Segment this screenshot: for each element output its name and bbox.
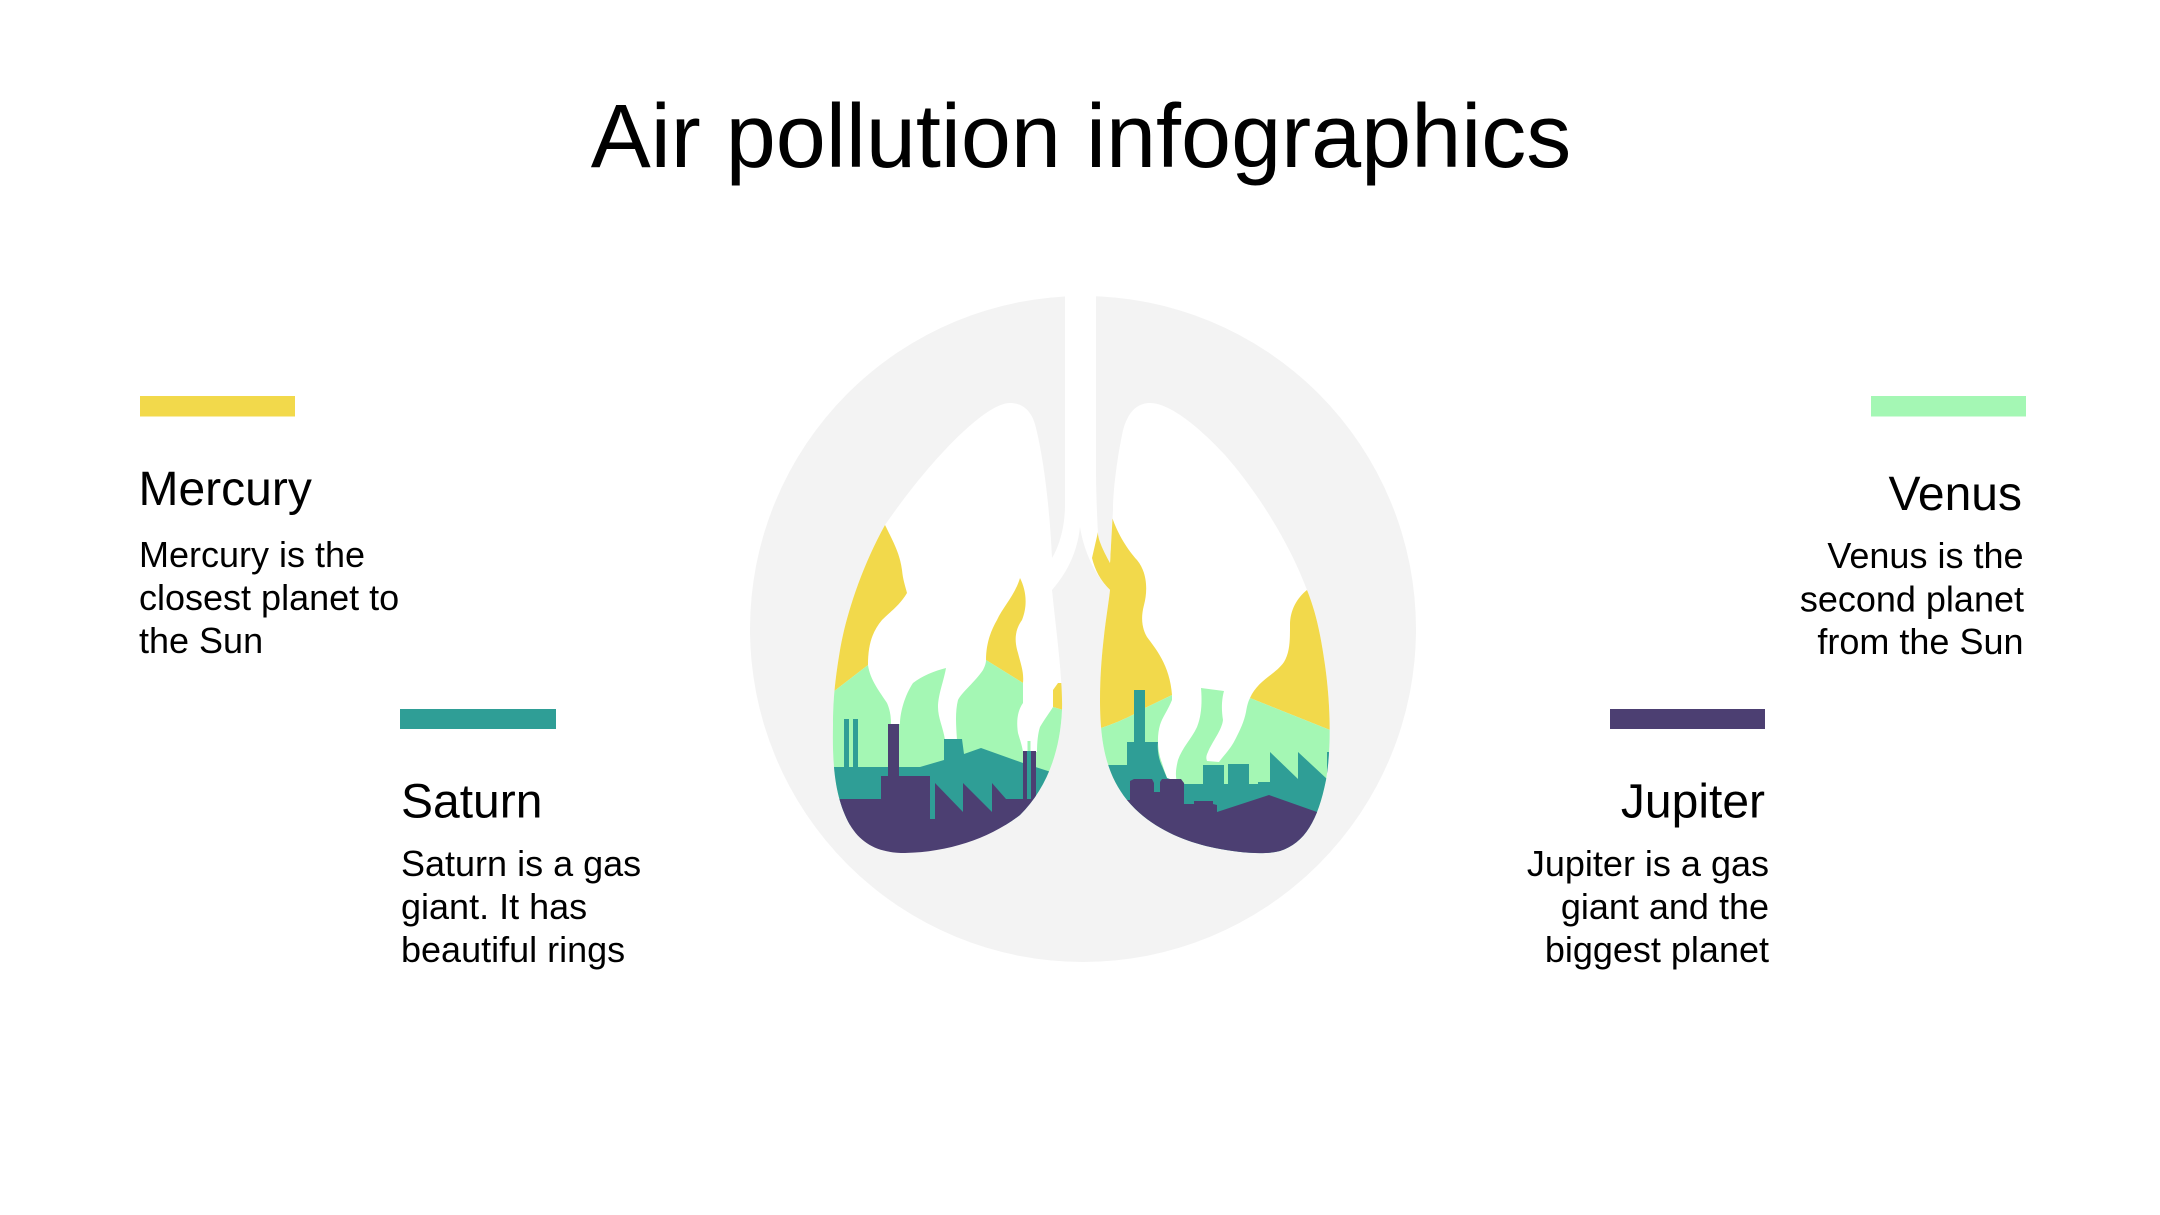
lungs and trachea silhouette — [833, 296, 1330, 853]
Mercury colour bar — [140, 396, 295, 416]
Venus description: Venus is the — [1827, 535, 2024, 576]
Mercury description: Mercury is the — [139, 534, 365, 575]
right lung pollution scene — [1092, 518, 1330, 854]
Saturn description: giant. It has — [401, 886, 587, 927]
Jupiter description: biggest planet — [1545, 929, 1769, 970]
Venus description: from the Sun — [1817, 621, 2024, 662]
Saturn colour bar — [400, 709, 556, 729]
panel: Mercury — [138, 396, 399, 661]
left lung yellow haze — [834, 525, 1062, 710]
title: Air pollution infographics — [591, 87, 1571, 187]
right lung purple foreground factories — [1127, 779, 1317, 854]
Saturn heading: Saturn — [401, 776, 542, 828]
Jupiter description: giant and the — [1561, 886, 1769, 927]
Saturn description: beautiful rings — [401, 929, 625, 970]
Jupiter colour bar — [1610, 709, 1765, 729]
right lung teal factories — [1108, 690, 1330, 854]
left lung teal factories — [834, 719, 1049, 825]
lungs illustration — [750, 296, 1416, 962]
panel: Jupiter — [1527, 709, 1769, 970]
left lung purple foreground factories — [839, 724, 1036, 853]
Venus description: second planet — [1800, 578, 2024, 620]
panel: Venus — [1800, 396, 2026, 662]
right lung yellow haze — [1092, 517, 1340, 732]
Mercury heading: Mercury — [138, 463, 312, 516]
left lung mint smog — [832, 660, 1062, 799]
Mercury description: the Sun — [139, 620, 263, 661]
Saturn description: Saturn is a gas — [401, 843, 641, 884]
Venus colour bar — [1871, 396, 2026, 416]
Venus heading: Venus — [1889, 468, 2022, 521]
panel: Saturn — [400, 709, 641, 970]
Jupiter heading: Jupiter — [1621, 776, 1765, 828]
right lung mint smog — [1095, 688, 1335, 820]
left lung pollution scene — [832, 525, 1062, 853]
Mercury description: closest planet to — [139, 577, 399, 618]
background circle — [750, 296, 1416, 962]
Jupiter description: Jupiter is a gas — [1527, 843, 1769, 884]
left lung small stack — [1027, 741, 1031, 766]
